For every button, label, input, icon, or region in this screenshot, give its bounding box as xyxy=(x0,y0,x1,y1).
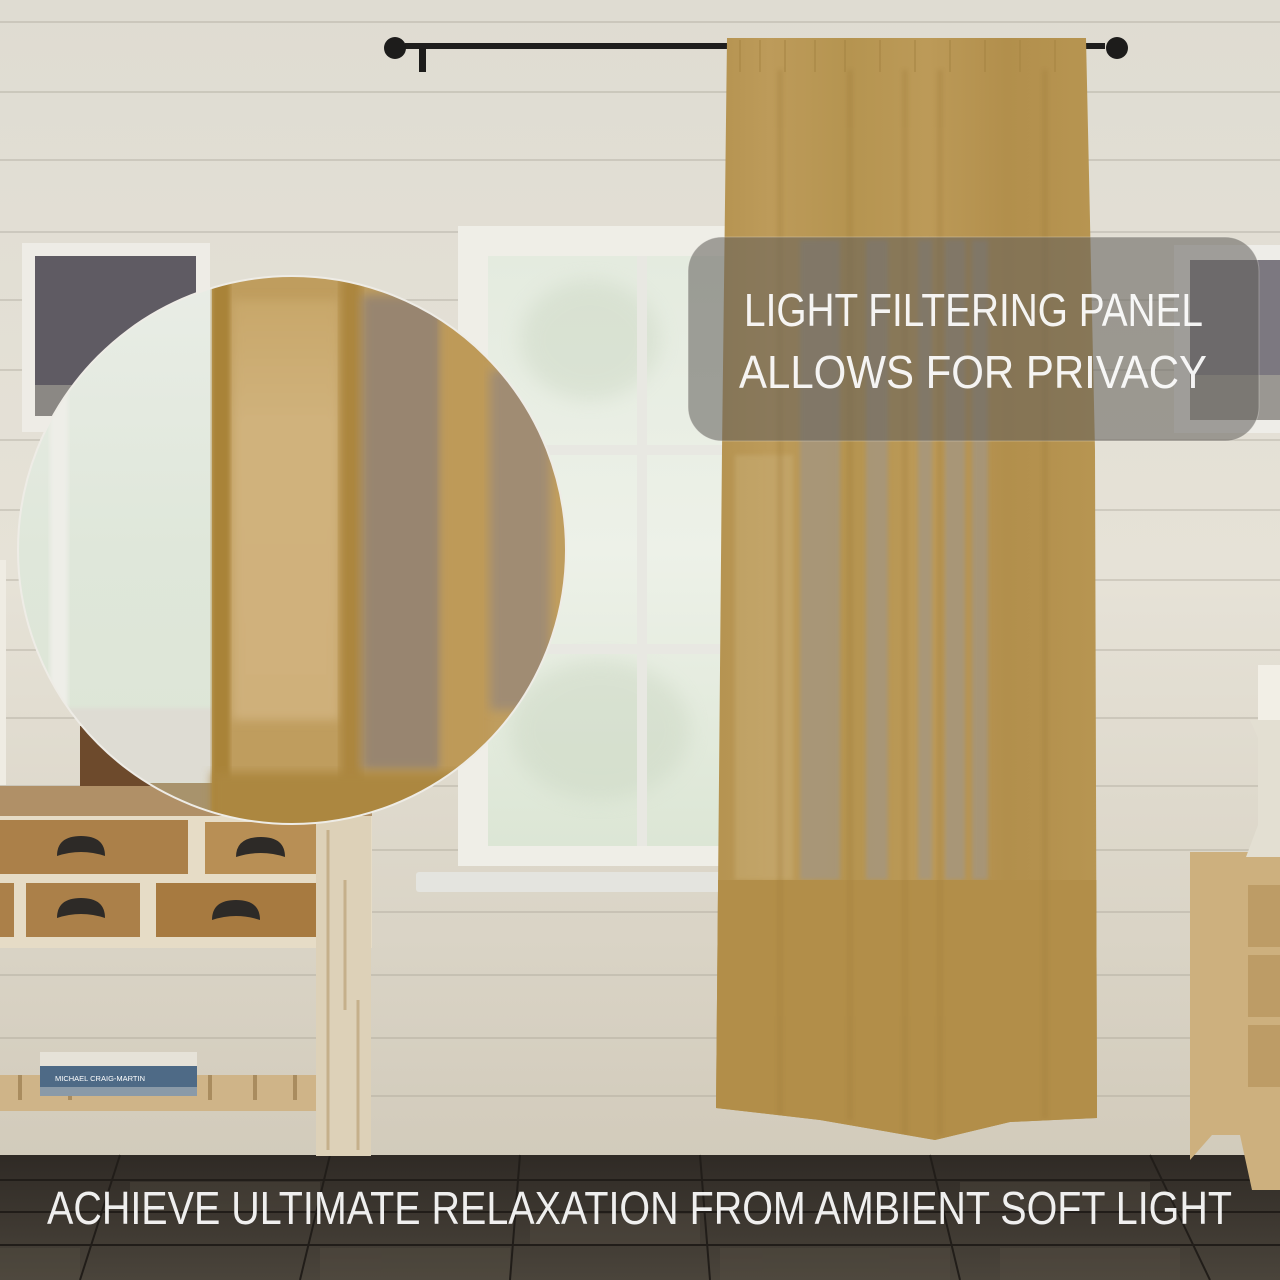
panel text xyxy=(739,284,1207,398)
right picture frame xyxy=(1174,245,1280,433)
right side cabinet xyxy=(1190,852,1280,1190)
curtain panel xyxy=(710,30,1105,1145)
panel text: ALLOWS FOR PRIVACY xyxy=(739,346,1207,398)
magnifier circle xyxy=(10,270,580,835)
books xyxy=(40,1052,197,1096)
left picture frame xyxy=(22,243,210,432)
curtain rod xyxy=(384,37,1128,72)
panel text: LIGHT FILTERING PANEL xyxy=(744,284,1203,336)
floor xyxy=(0,1155,1280,1280)
window xyxy=(416,226,728,892)
info panel: light filtering xyxy=(688,237,1259,441)
left wall sconce candle xyxy=(0,560,6,785)
left console table xyxy=(0,786,372,1156)
wooden box on console xyxy=(80,726,210,786)
candle xyxy=(1246,665,1280,857)
books: MICHAEL CRAIG-MARTIN xyxy=(55,1074,145,1083)
